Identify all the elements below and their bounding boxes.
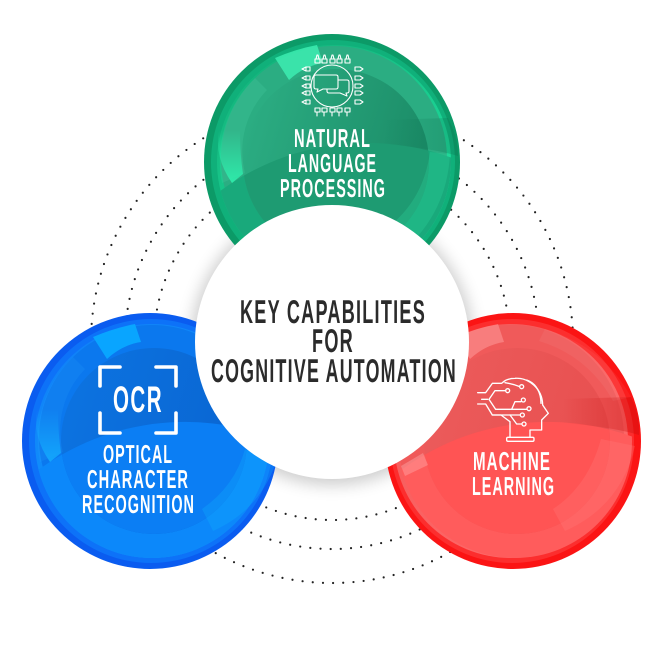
center circle shadow <box>191 203 473 485</box>
icon: chip with speech bubbles <box>302 55 363 116</box>
label: natural language processing <box>280 123 386 203</box>
sphere: optical character recognition <box>22 313 278 569</box>
sphere: machine learning <box>385 313 641 569</box>
label: optical character recognition <box>82 439 195 519</box>
label: optical character recognition: CHARACTER <box>87 464 189 494</box>
label: natural language processing: NATURAL <box>294 123 371 153</box>
title: KEY CAPABILITIES <box>240 293 426 330</box>
label: machine learning: MACHINE <box>473 446 551 476</box>
label: machine learning <box>472 446 555 501</box>
center circle <box>195 205 469 479</box>
label: optical character recognition: OPTICAL <box>103 439 173 469</box>
label: natural language processing: LANGUAGE <box>288 148 377 178</box>
dotted rings <box>91 101 573 583</box>
title <box>211 293 457 389</box>
icon: OCR frame <box>100 367 176 433</box>
title: FOR <box>312 322 354 359</box>
sphere: natural language processing <box>204 34 460 246</box>
icon: circuit head <box>478 378 548 441</box>
icon: OCR frame: OCR <box>113 379 163 420</box>
title: COGNITIVE AUTOMATION <box>211 352 457 389</box>
label: machine learning: LEARNING <box>472 471 555 501</box>
label: optical character recognition: RECOGNITION <box>82 489 195 519</box>
label: natural language processing: PROCESSING <box>280 173 386 203</box>
